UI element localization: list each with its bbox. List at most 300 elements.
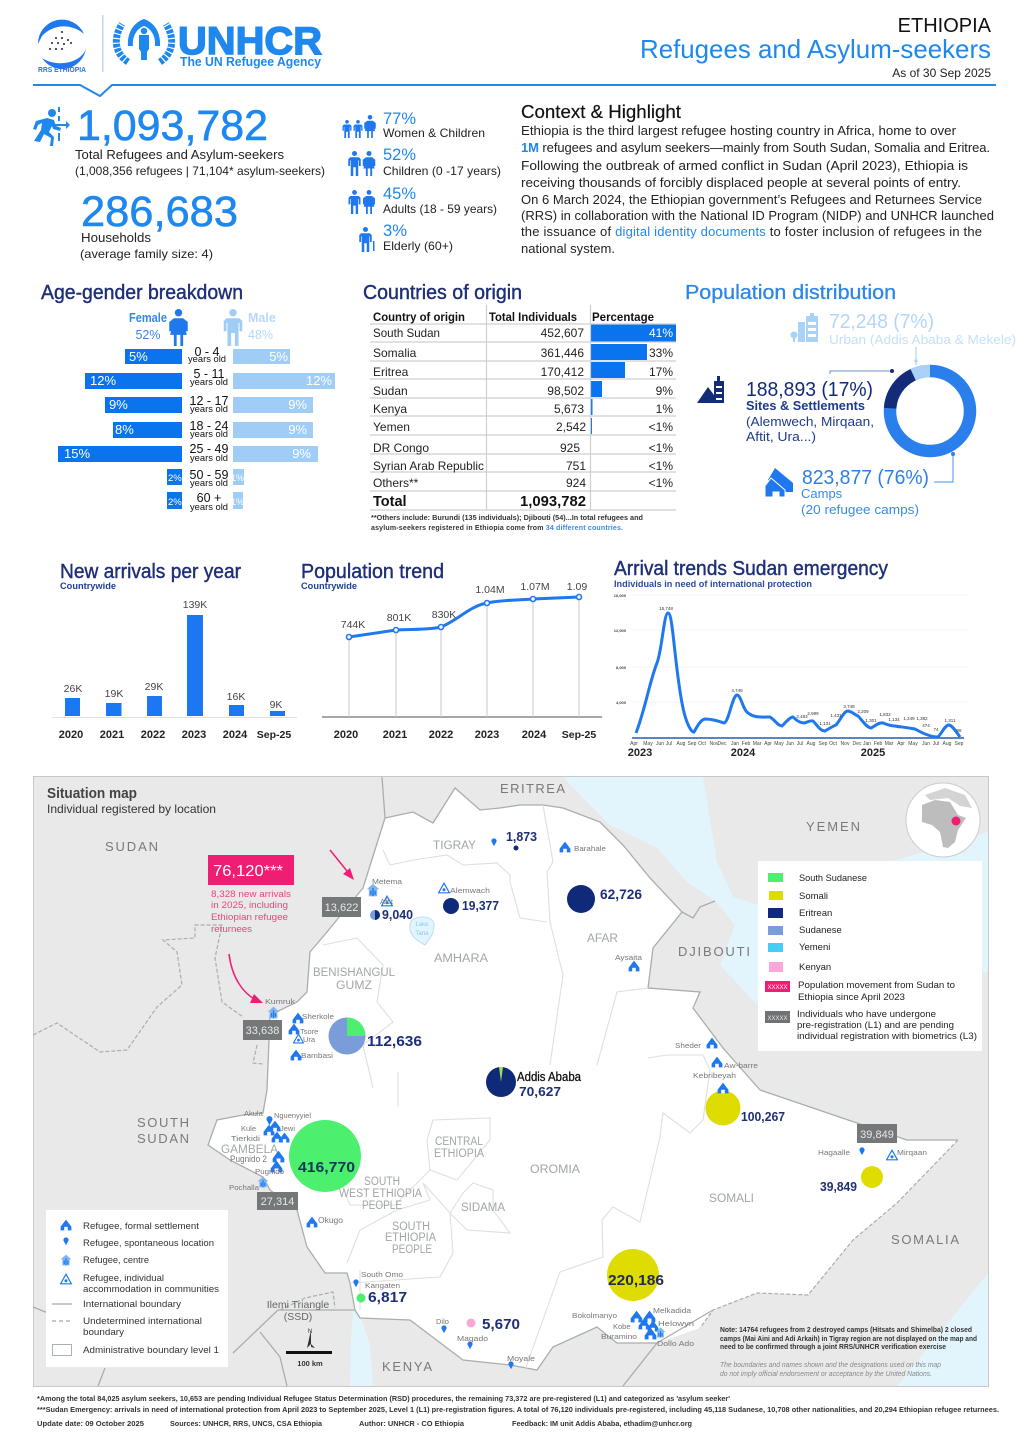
location names: Pugnido 2 (230, 1154, 267, 1164)
footer notes: Feedback: IM unit Addis Ababa, ethadim@unhcr.org (512, 1419, 692, 1428)
legend: nationalities and boxes: Individuals who have undergone (797, 1009, 936, 1020)
bar chart: 16K (227, 691, 245, 703)
sea areas (350, 777, 988, 1386)
line chart: 2020 (334, 729, 358, 741)
location names: Melkadida (653, 1306, 692, 1315)
legend: male: Male (248, 311, 276, 325)
panel: age-gender breakdown: 9% (109, 397, 128, 412)
urban label: 72,248 (7%) (829, 311, 934, 333)
settlements label: Aftit, Ura...) (746, 429, 816, 444)
map notes: camps (Mai Aini and Adi Arkaih) in Tigray region are not displayed on the map and (720, 1336, 977, 1343)
legend: nationalities and boxes: Eritrean (799, 908, 832, 919)
panel: age-gender breakdown: 5% (129, 349, 148, 364)
logo: UNHCR wordmark: The UN Refugee Agency (180, 55, 321, 69)
location names: Aw-barre (724, 1061, 758, 1070)
icon: sites and settlements (697, 376, 724, 403)
male bars (233, 349, 335, 509)
legend: female (129, 309, 188, 346)
area line chart: Sep (819, 741, 828, 747)
heading: Population trend (301, 561, 444, 583)
map title (47, 785, 216, 816)
location names: Pugnido (255, 1167, 284, 1176)
region labels: GAMBELA (221, 1144, 278, 1156)
map notes (720, 1327, 977, 1378)
population figures: 19,377 (462, 898, 499, 913)
area line chart: Mar (753, 741, 762, 747)
panel: demographic percentages: Elderly (60+) (383, 239, 453, 253)
icon: urban (790, 313, 818, 342)
header rule with notch (33, 85, 996, 96)
area line chart: 74 (933, 727, 939, 732)
footer notes (37, 1394, 999, 1428)
table footnote (371, 515, 643, 532)
panel: age-gender breakdown: 12% (306, 373, 332, 388)
age labels: years old (190, 404, 228, 415)
area line chart: Jun (656, 741, 664, 747)
icon: adults (348, 190, 375, 214)
location names: Barahale (574, 844, 606, 853)
area line chart: Apr (630, 741, 638, 747)
admin boundaries (323, 805, 710, 1370)
area line chart: Aug (677, 741, 686, 747)
area line chart: Aug (943, 741, 952, 747)
bar chart: Sep-25 (257, 729, 291, 741)
scale bar and north arrow: N (308, 1329, 312, 1335)
region labels: PEOPLE (362, 1200, 402, 1212)
legend: location types: Undetermined international (83, 1316, 202, 1327)
area line chart: 4,749 (731, 688, 743, 693)
area line chart: May (774, 741, 784, 747)
footer notes: Sources: UNHCR, RRS, UNCS, CSA Ethiopia (170, 1419, 323, 1428)
region labels: SIDAMA (461, 1202, 505, 1214)
Ilemi triangle label (267, 1299, 329, 1323)
panel: headline figures: (average family size: 4) (80, 247, 213, 261)
footer notes: Update date: 09 October 2025 (37, 1419, 144, 1428)
location names: Tierkidi (231, 1134, 260, 1143)
lake Tana: Tana (415, 931, 429, 937)
area line chart: 1,832 (879, 712, 891, 717)
table rows: Total (373, 494, 407, 510)
legend: nationalities and boxes: Sudanese (799, 925, 842, 936)
legend: location types: Refugee, centre (83, 1255, 149, 1266)
area line chart: 2024 (731, 747, 756, 759)
line chart: 2021 (383, 729, 407, 741)
table rows: 925 (560, 441, 580, 455)
table rows: 1,093,782 (520, 494, 586, 510)
footer notes: ***Sudan Emergency: arrivals in need of international protection from April 2023 to September 2025, Level 1 (L1) pre-registration figures. A total of 76,120 individuals pre-registered, including 45,118 Sudanese, 10,708 other nationalities, and 20,294 Ethiopian refugee returnees. (37, 1405, 999, 1414)
footer notes: Author: UNHCR - CO Ethiopia (359, 1419, 465, 1428)
callout: pink total arrivals: returnees (211, 924, 253, 934)
location names: Metema (372, 877, 403, 886)
legend: nationalities and boxes (758, 861, 982, 1051)
line chart: 744K (341, 619, 365, 631)
country labels: KENYA (382, 1359, 432, 1374)
area line chart: 2,209 (857, 709, 869, 714)
lake Tana: Lake (415, 922, 429, 928)
panel: demographic percentages: 52% (383, 145, 416, 164)
legend: location types: Refugee, formal settlement (83, 1221, 199, 1232)
table header: Percentage (592, 310, 654, 324)
panel: context and highlight: receiving thousands of forcibly displaced people at several points of entry. (521, 175, 961, 190)
area line chart: 474 (922, 723, 930, 728)
location names: Alemwach (450, 886, 490, 895)
grey pending-registration boxes (243, 897, 897, 1210)
table rows: 2,542 (556, 420, 586, 434)
bar chart: 26K (64, 683, 82, 695)
area line chart: 8,000 (616, 665, 627, 670)
area line chart: Feb (742, 741, 751, 747)
area line chart: Jan (731, 741, 739, 747)
area line chart: May (643, 741, 653, 747)
heading: Population distribution (685, 282, 896, 304)
map notes: Note: 14764 refugees from 2 destroyed camps (Hitsats and Shimelba) 2 closed (720, 1327, 972, 1334)
country labels: SUDAN (137, 1131, 189, 1146)
population figures: 220,186 (608, 1273, 664, 1289)
population figures: 9,040 (382, 907, 413, 922)
international boundaries (33, 777, 958, 1386)
line chart: 2023 (475, 729, 499, 741)
region labels: PEOPLE (392, 1244, 432, 1256)
line chart (322, 581, 602, 741)
icon: person crossing border (33, 107, 70, 146)
panel: headline figures: 286,683 (81, 188, 238, 236)
table header (373, 310, 654, 324)
footer notes: *Among the total 84,025 asylum seekers, 10,653 are pending Individual Refugee Status Determination (RSD) procedures, the remaining 73,372 are pre-registered (L1) and categorized as 'asylum seeker' (37, 1394, 730, 1403)
region labels: SOMALI (709, 1193, 754, 1205)
legend: location types: Administrative boundary level 1 (83, 1345, 219, 1356)
panel: context and highlight: Ethiopia is the third largest refugee hosting country in Africa, home to over (521, 123, 957, 138)
map notes: The boundaries and names shown and the designations used on this map (720, 1362, 941, 1369)
panel: headline figures: Total Refugees and Asylum-seekers (75, 147, 284, 162)
area line chart: Oct (698, 741, 706, 747)
panel: headline figures: Households (81, 230, 152, 245)
region labels: WEST ETHIOPIA (339, 1188, 422, 1200)
location names: Kobe (613, 1322, 631, 1331)
panel: headline figures (33, 102, 325, 261)
table rows: 98,502 (547, 384, 584, 398)
panel: context and highlight: (RRS) in collaboration with the National ID Program (NIDP) and UNHCR launched (521, 208, 994, 223)
region labels: SOUTH (364, 1176, 400, 1188)
panel: age-gender breakdown: 9% (292, 446, 311, 461)
settlements label (746, 379, 874, 444)
table rows: 33% (649, 346, 673, 360)
location names: Aysaita (615, 953, 643, 962)
table rows: 170,412 (541, 365, 584, 379)
area line chart: 1,382 (916, 716, 928, 721)
region labels: BENISHANGUL (313, 967, 396, 979)
map title: Individual registered by location (47, 802, 216, 816)
legend: female: 52% (135, 328, 161, 342)
table grid (370, 305, 676, 510)
panel: age-gender breakdown: 12% (90, 373, 116, 388)
area line chart: Dec (853, 741, 862, 747)
area line chart: 3,748 (843, 704, 855, 709)
bar chart: 9K (270, 699, 282, 711)
country labels: YEMEN (806, 819, 860, 834)
line chart: 2024 (522, 729, 547, 741)
population figures: 1,873 (506, 829, 537, 844)
bar chart: 19K (105, 688, 123, 700)
panel: age-gender breakdown: 15% (64, 446, 90, 461)
location names: Bokolmanyo (572, 1311, 617, 1320)
location names: Kumruk (265, 997, 295, 1006)
region labels: AFAR (587, 933, 618, 945)
country labels (105, 781, 959, 1374)
legend: nationalities and boxes: individual registration with biometrics (L3) (797, 1031, 977, 1042)
bar chart (52, 599, 297, 741)
locator globe (906, 783, 980, 857)
age labels: years old (188, 354, 226, 365)
table footnote: asylum-seekers registered in Ethiopia come from 34 different countries. (371, 525, 623, 532)
legend: male (224, 309, 276, 346)
location names: Ura (303, 1035, 316, 1044)
age labels: 60 + (197, 491, 221, 505)
urban label (829, 311, 1016, 347)
area line chart: 2025 (861, 747, 885, 759)
table rows: 9% (656, 384, 673, 398)
grey pending-registration boxes: 33,638 (246, 1025, 279, 1037)
area line chart: 98 (956, 728, 962, 733)
panel: situation map (33, 776, 988, 1386)
age labels: 0 - 4 (194, 345, 220, 359)
age labels: years old (190, 453, 228, 464)
settlements label: (Alemwech, Mirqaan, (746, 414, 874, 429)
table rows: 924 (566, 476, 586, 490)
panel: demographic percentages: 3% (383, 221, 407, 240)
line chart: Sep-25 (562, 729, 596, 741)
legend: nationalities and boxes: Yemeni (799, 942, 830, 953)
area line chart: Jun (922, 741, 930, 747)
area line chart: Jul (797, 741, 803, 747)
country labels: SOUTH (137, 1115, 189, 1130)
location names (229, 844, 927, 1363)
legend: male: 48% (248, 328, 273, 342)
region labels (221, 840, 754, 1256)
callout: pink total arrivals: in 2025, including (211, 900, 288, 910)
location names: Helowyn (658, 1319, 694, 1328)
location names: Dollo Ado (657, 1339, 694, 1348)
location names: Nguenyyiel (274, 1111, 311, 1120)
table rows: <1% (649, 476, 673, 490)
population figures: 70,627 (519, 1084, 561, 1099)
country labels: SUDAN (105, 839, 158, 854)
location names: Tsore (300, 1027, 318, 1036)
Ethiopia land (208, 788, 958, 1370)
Ilemi triangle label: Ilemi Triangle (267, 1299, 329, 1311)
population figures: 112,636 (367, 1034, 422, 1050)
area line chart: 1,301 (865, 718, 877, 723)
location names: Kangaten (365, 1281, 400, 1290)
map notes: need to be confirmed through a joint RRS/UNHCR verification exercise (720, 1344, 946, 1351)
region labels: CENTRAL (435, 1136, 484, 1148)
legend: location types: boundary (83, 1327, 124, 1338)
panel: context and highlight: Following the outbreak of armed conflict in Sudan (April 2023), Ethiopia is (521, 158, 969, 173)
panel: demographic percentages: 77% (383, 109, 416, 128)
age labels: years old (190, 478, 228, 489)
percentage bars (591, 324, 676, 434)
location names: Kule (241, 1124, 256, 1133)
icon: women and children (342, 115, 376, 138)
panel: context and highlight: On 6 March 2024, the Ethiopian government’s Refugees and Returnees Service (521, 192, 982, 207)
area line chart: Jul (933, 741, 939, 747)
area line chart: May (908, 741, 918, 747)
callout: pink total arrivals (208, 855, 294, 934)
area line chart: Nov (710, 741, 719, 747)
area line chart: 2,483 (796, 714, 808, 719)
age labels: 12 - 17 (190, 394, 229, 408)
line chart: 1.09 (567, 581, 587, 593)
legend: nationalities and boxes: XXXXX (767, 1016, 788, 1022)
location names: Okugo (318, 1215, 343, 1225)
lake Tana (410, 917, 434, 945)
panel: headline figures: 1,093,782 (77, 102, 268, 150)
panel: demographic percentages: Children (0 -17 years) (383, 164, 501, 178)
header logos (38, 15, 322, 74)
table rows: <1% (649, 459, 673, 473)
area line chart: Jun (786, 741, 794, 747)
legend: nationalities and boxes: Somali (799, 891, 828, 902)
table header: Country of origin (373, 310, 465, 324)
age labels: years old (190, 377, 228, 388)
age labels: 18 - 24 (190, 419, 229, 433)
region labels: GUMZ (336, 980, 372, 992)
location names: Hagaalle (818, 1148, 850, 1157)
table header: Total Individuals (489, 310, 577, 324)
age labels: 5 - 11 (193, 367, 225, 381)
panel: context and highlight: Context & Highlight (521, 102, 681, 122)
area line chart: Sep (955, 741, 964, 747)
heading: Arrival trends Sudan emergency (614, 558, 888, 580)
table rows: DR Congo (373, 441, 429, 455)
location names: South Omo (361, 1270, 403, 1279)
country labels: ERITREA (500, 781, 565, 796)
title block: As of 30 Sep 2025 (892, 66, 991, 80)
settlements label: 188,893 (17%) (746, 379, 873, 401)
panel: age-gender breakdown: 8% (115, 422, 134, 437)
location names: Moyale (507, 1354, 535, 1363)
panel: age-gender breakdown: 2% (168, 497, 182, 508)
area line chart: 16,000 (614, 593, 627, 598)
location names: Mirqaan (897, 1148, 927, 1157)
panel: demographic percentages: 45% (383, 184, 416, 203)
map notes: do not imply official endorsement or acceptance by the United Nations. (720, 1371, 932, 1378)
area line chart: Nov (841, 741, 850, 747)
area line chart: Oct (829, 741, 837, 747)
legend: female: Female (129, 311, 167, 325)
bar chart: 29K (145, 681, 163, 693)
panel: context and highlight: the issuance of digital identity documents to foster inclusion of refugees in the (521, 224, 982, 239)
female bars (58, 349, 182, 509)
icon: children (348, 151, 375, 176)
area line chart (614, 593, 968, 759)
age labels (188, 345, 229, 513)
logo: RRS emblem: RRS ETHIOPIA (38, 67, 86, 74)
title block: ETHIOPIA (898, 15, 992, 37)
population figures: 100,267 (741, 1110, 785, 1124)
line chart: 1.07M (520, 581, 550, 593)
area line chart: 4,000 (616, 700, 627, 705)
legend: location types (46, 1210, 228, 1367)
bar chart: 2023 (182, 729, 206, 741)
legend: nationalities and boxes: South Sudanese (799, 873, 867, 884)
age labels: 25 - 49 (190, 442, 229, 456)
bar chart: 2021 (100, 729, 124, 741)
callout: pink total arrivals: 8,328 new arrivals (211, 889, 292, 899)
region labels: TIGRAY (433, 840, 476, 852)
area line chart: Sep (688, 741, 697, 747)
panel: arrival trends Sudan emergency (614, 558, 968, 759)
settlements label: Sites & Settlements (746, 398, 865, 413)
country labels: SOMALIA (891, 1232, 959, 1247)
grey pending-registration boxes: 13,622 (325, 902, 358, 914)
location names: Jewi (280, 1124, 295, 1133)
panel: demographic percentages (342, 109, 501, 253)
table footnote: **Others include: Burundi (135 individuals); Djibouti (54)...In total refugees and (371, 515, 643, 522)
population figures (298, 829, 857, 1333)
legend: location types: International boundary (83, 1299, 181, 1310)
legend: nationalities and boxes: Kenyan (799, 962, 831, 973)
area line chart: 1,311 (945, 718, 956, 723)
icon: camps (765, 468, 793, 497)
region labels: SOUTH (392, 1221, 430, 1233)
panel: demographic percentages: Adults (18 - 59 years) (383, 202, 497, 216)
panel: age-gender breakdown: 9% (288, 397, 307, 412)
population figures: 39,849 (820, 1180, 857, 1194)
table rows: <1% (649, 441, 673, 455)
panel: population distribution (685, 282, 1016, 517)
area line chart: 1,249 (903, 716, 915, 721)
table rows: Sudan (373, 384, 408, 398)
area line chart: 12,000 (614, 628, 627, 633)
grey pending-registration boxes: 27,314 (261, 1196, 294, 1208)
line chart: 830K (432, 609, 456, 621)
table rows: 17% (649, 365, 673, 379)
proportional circles (289, 846, 883, 1328)
population figures: 62,726 (600, 887, 642, 902)
region labels: OROMIA (530, 1164, 580, 1176)
panel: demographic percentages: Women & Children (383, 126, 485, 140)
heading: New arrivals per year (60, 561, 241, 583)
population figures: 5,670 (482, 1317, 520, 1333)
heading: Countries of origin (363, 282, 522, 304)
panel: population trend: Countrywide (301, 581, 357, 591)
table rows: 41% (649, 326, 673, 340)
grey pending-registration boxes: 39,849 (860, 1129, 894, 1141)
map background (34, 776, 988, 1386)
table rows: 751 (566, 459, 586, 473)
callout: pink total arrivals: Ethiopian refugee (211, 912, 288, 922)
area line chart: Feb (874, 741, 883, 747)
location names: Magado (457, 1334, 488, 1343)
panel: context and highlight (521, 102, 994, 256)
region labels: ETHIOPIA (385, 1232, 436, 1244)
bar chart: 139K (183, 599, 207, 611)
donut chart (890, 371, 970, 451)
table rows: Syrian Arab Republic (373, 459, 484, 473)
title block: Refugees and Asylum-seekers (640, 34, 991, 64)
panel: arrival trends Sudan emergency: Individuals in need of international protection (614, 579, 812, 590)
location names: Pochalla (229, 1183, 260, 1192)
arrow: to Kumruk (229, 954, 263, 1003)
region labels: ETHIOPIA (434, 1148, 484, 1160)
location names: Akula (244, 1109, 264, 1118)
area line chart: 15,748 (659, 606, 673, 611)
location names: Kebribeyah (693, 1071, 736, 1080)
logo: UNHCR wordmark: UNHCR (178, 20, 322, 63)
age labels: years old (190, 429, 228, 440)
legend: location types: Refugee, individual (83, 1273, 164, 1284)
panel: age-gender breakdown: 1% (231, 473, 244, 483)
